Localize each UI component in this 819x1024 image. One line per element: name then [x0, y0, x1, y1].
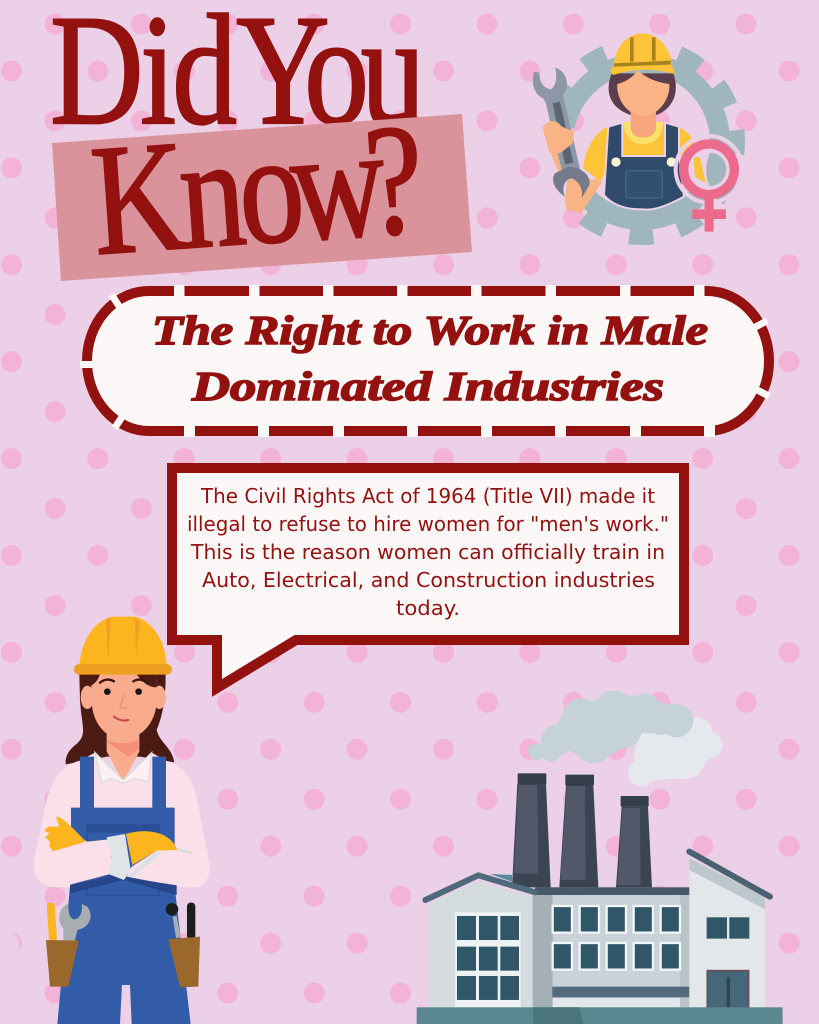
tools in pouches: [46, 902, 200, 987]
body text: [187, 484, 669, 620]
body text: today.: [396, 596, 460, 620]
overalls: [57, 757, 191, 1024]
female symbol: [676, 136, 742, 232]
hair: [609, 73, 676, 115]
body text: illegal to refuse to hire women for "men's work.": [187, 512, 669, 536]
body text: This is the reason women can officially train in: [190, 540, 665, 564]
middle building: [533, 895, 689, 1007]
banner text line 1: The Right to Work in Male: [152, 307, 708, 353]
crossed arms: [34, 817, 209, 887]
bubble outline: [172, 468, 684, 688]
left building: [429, 882, 533, 1007]
face and neck: [617, 70, 669, 137]
hair: [66, 674, 174, 764]
illustration: woman worker in hard hat: [34, 617, 210, 1024]
gear: [536, 36, 748, 248]
helmet: [611, 33, 675, 75]
icon: woman engineer with gear, wrench and female symbol: [533, 33, 748, 248]
banner text line 2: Dominated Industries: [191, 363, 664, 409]
door: [707, 971, 749, 1008]
neck: [107, 732, 139, 782]
middle windows: [553, 906, 680, 970]
ground: [417, 1007, 783, 1024]
left windows: [455, 912, 521, 1007]
dashed pill border: [80, 285, 771, 437]
speech bubble: [172, 468, 684, 688]
body text: Auto, Electrical, and Construction industries: [202, 568, 655, 592]
bib pocket: [86, 824, 160, 896]
face: [81, 674, 166, 757]
helmet: [74, 617, 172, 675]
wrench: [533, 68, 590, 213]
wall band: [552, 987, 689, 997]
collar: [95, 753, 152, 783]
title banner: [80, 285, 771, 437]
hand grip: [543, 121, 574, 153]
roofs: [425, 852, 770, 900]
chimneys: [512, 773, 652, 887]
dark smoke: [528, 690, 693, 763]
overalls: [604, 123, 684, 210]
arm and hand: [550, 148, 602, 213]
heading panel: Know?: Know?: [86, 91, 429, 289]
pocket: [626, 171, 662, 198]
buttons: [611, 157, 676, 167]
waist shadow: [70, 873, 177, 895]
shirt: [583, 122, 695, 182]
right window: [707, 917, 749, 939]
right building: [689, 858, 765, 1007]
shirt body: [34, 753, 210, 887]
illustration: factory with smoke: [417, 690, 783, 1024]
body text: The Civil Rights Act of 1964 (Title VII) made it: [200, 484, 655, 508]
light smoke: [628, 717, 722, 787]
